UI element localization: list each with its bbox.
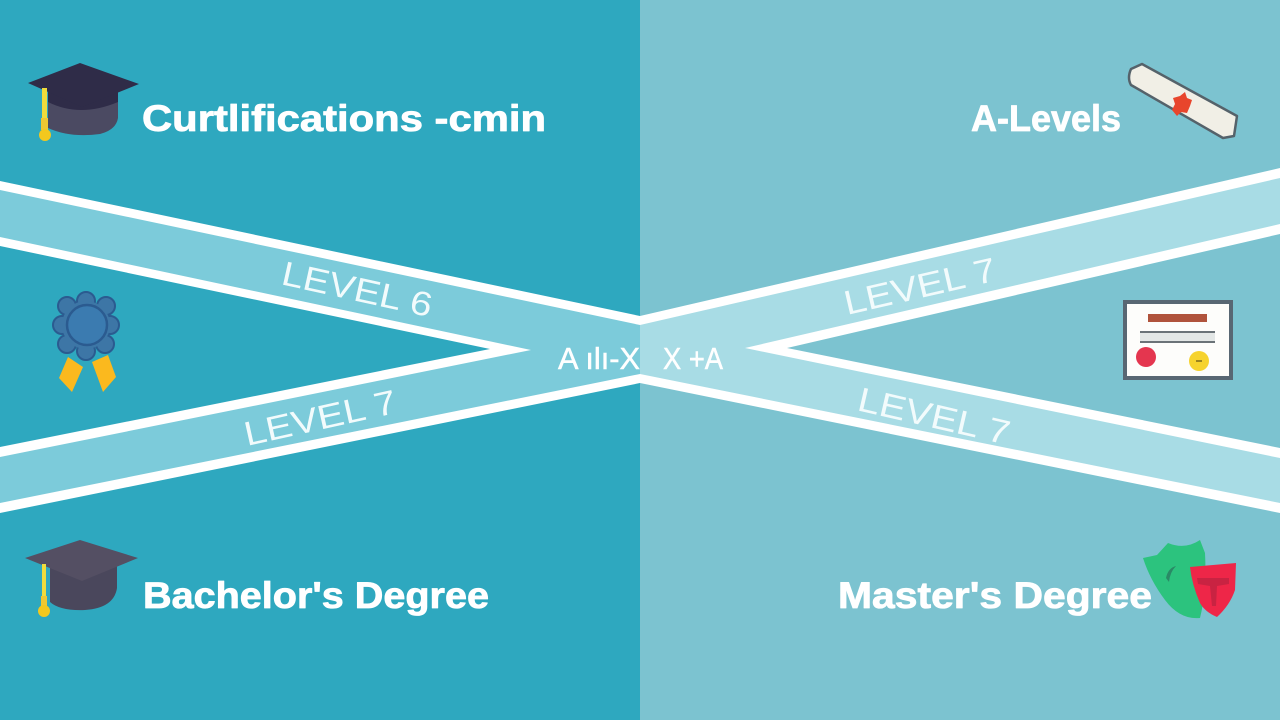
icon: dark graduation cap	[28, 63, 139, 141]
panel: left background	[0, 0, 640, 720]
heading: master's degree: Master's Degree	[838, 575, 1152, 616]
centre label left: A ılı-X	[558, 341, 640, 376]
icon: grey graduation cap	[25, 540, 138, 617]
panel: right background	[640, 0, 1280, 720]
left crossing bands	[0, 181, 640, 513]
centre label right: X +A	[663, 341, 723, 376]
icon: blue rosette with ribbons	[53, 292, 119, 392]
heading: bachelor's degree: Bachelor's Degree	[143, 575, 489, 616]
band label: right upper level 7: LEVEL 7	[840, 251, 1000, 323]
icon: certificate	[1123, 300, 1233, 380]
icon: green and red crests	[1143, 540, 1236, 618]
right crossing bands	[640, 168, 1280, 513]
band label: left level 7: LEVEL 7	[241, 383, 400, 454]
band label: right lower level 7: LEVEL 7	[854, 381, 1014, 453]
heading: certifications: Curtlifications -cmin	[142, 98, 546, 139]
icon: rolled diploma	[1129, 64, 1237, 138]
band label: level 6: LEVEL 6	[278, 255, 436, 325]
heading: a-levels: A-Levels	[971, 98, 1121, 139]
